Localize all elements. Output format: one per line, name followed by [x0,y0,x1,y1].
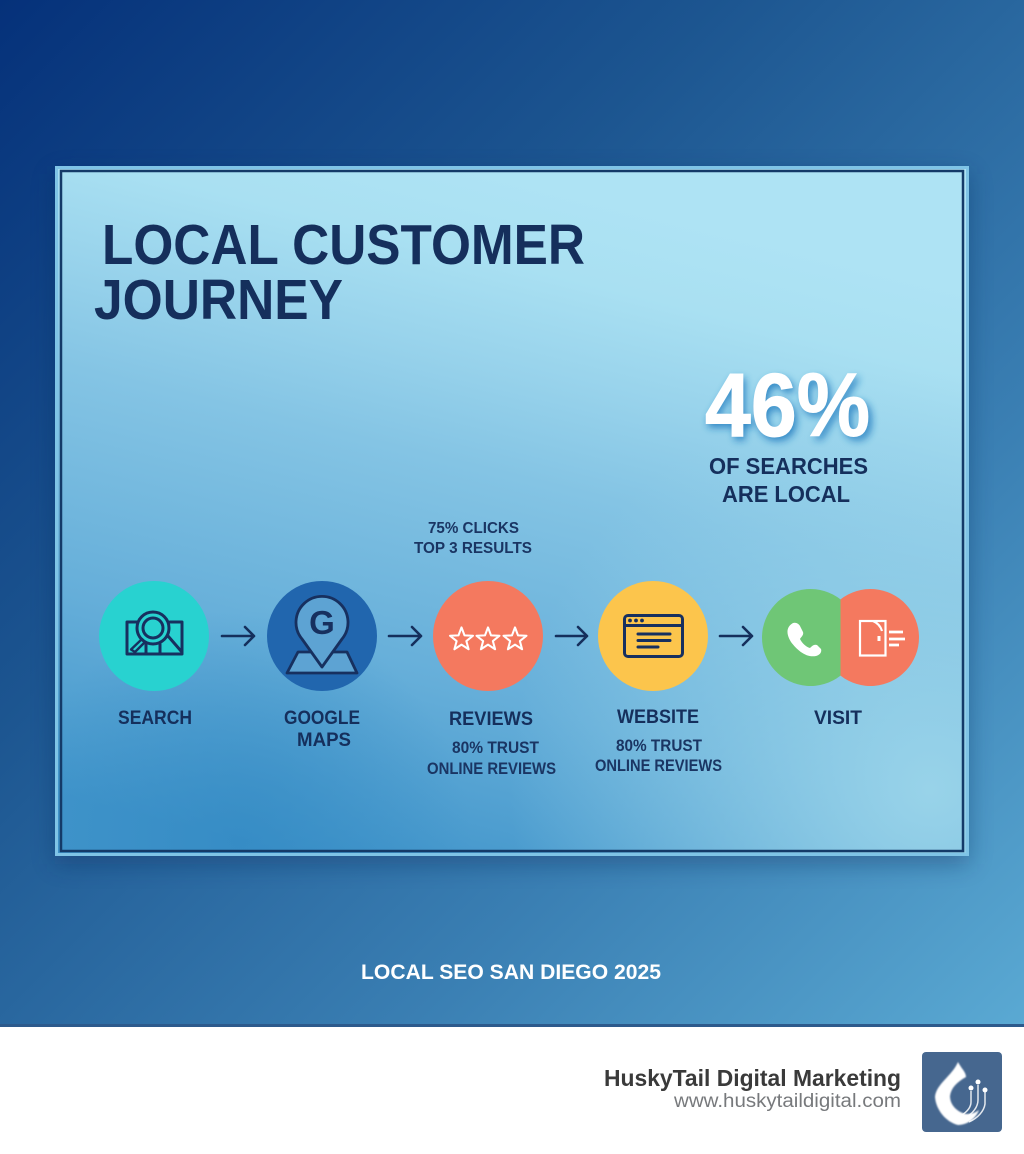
icon: door [860,621,905,656]
website circle [598,581,708,691]
label: SEARCH [118,707,192,729]
label: WEBSITE [617,706,699,728]
callout: 75% clicks [414,520,532,557]
stat text: ONLINE REVIEWS [595,757,722,775]
step: search [99,581,209,729]
stat text [427,739,556,778]
G: G [309,604,335,641]
reviews circle [433,581,543,691]
icon: map pin [287,596,357,673]
step: google maps: MAPS [297,729,351,751]
title: JOURNEY [94,268,343,332]
stat text [595,737,722,775]
brand bar [0,1024,1024,1154]
icon: browser window [624,616,682,656]
stat text: 80% TRUST [616,737,702,755]
stat: 46% of searches are local: ARE LOCAL [722,481,850,507]
callout: 75% clicks: 75% CLICKS [428,520,519,537]
logo [922,1052,1002,1132]
company name: HuskyTail Digital Marketing [604,1065,901,1091]
step: reviews [427,581,556,778]
label: GOOGLE [284,707,360,729]
panel: journey card [55,166,969,864]
title: LOCAL CUSTOMER [102,213,585,277]
label: VISIT [814,707,862,729]
search circle [99,581,209,691]
stat: 46% of searches are local [705,356,874,507]
maps circle [267,581,377,691]
stat: 46% of searches are local: OF SEARCHES [709,453,868,479]
footer caption: LOCAL SEO SAN DIEGO 2025 [361,961,661,984]
stat: 46% of searches are local: 46% [705,356,870,456]
green half [762,589,840,686]
company url: www.huskytaildigital.com [673,1091,901,1112]
step: website [595,581,722,775]
callout: 75% clicks: TOP 3 RESULTS [414,540,532,557]
icon: phone [787,623,821,656]
icon: three stars [450,627,526,649]
label: REVIEWS [449,708,533,730]
arrow [222,627,254,645]
arrow [389,627,421,645]
stat text: 80% TRUST [452,739,539,757]
stat text: ONLINE REVIEWS [427,760,556,778]
arrow [556,627,587,645]
step: visit [762,589,919,729]
step: google maps [267,581,377,751]
icon: map with magnifier [127,612,182,654]
stat: 46% of searches are local: 46% [707,360,874,460]
arrow [720,627,752,645]
coral half [840,589,919,686]
title [94,213,585,332]
